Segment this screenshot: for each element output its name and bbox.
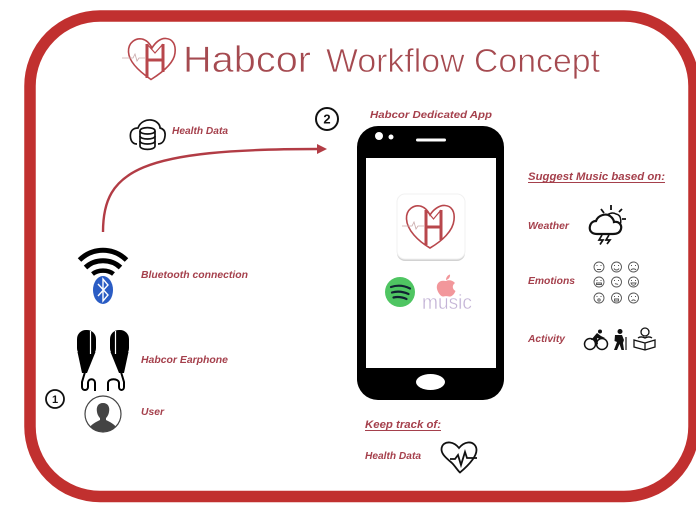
heading: keep track: Keep track of: — [365, 419, 441, 431]
label: weather: Weather — [528, 221, 570, 232]
icon: apple music — [422, 274, 472, 314]
label: dedicated app: Habcor Dedicated App — [370, 110, 492, 121]
speaker — [416, 138, 446, 142]
label: user: User — [141, 407, 165, 418]
icon: bluetooth — [93, 276, 113, 304]
label: activity: Activity — [527, 334, 565, 345]
phone screen — [366, 158, 496, 368]
icon: emotion faces grid — [594, 262, 638, 303]
label: tracked health data: Health Data — [365, 451, 421, 462]
icon: spotify — [385, 277, 415, 307]
step marker 2: 2 — [323, 112, 331, 126]
icon: activities — [584, 328, 655, 350]
icon: earphones — [77, 330, 129, 391]
label: emotions: Emotions — [528, 276, 575, 287]
icon: heart with pulse — [442, 442, 477, 472]
icon: Habcor heart logo — [122, 38, 175, 80]
icon: wifi signal — [80, 250, 126, 274]
icon: reader — [634, 328, 655, 350]
camera — [375, 132, 394, 140]
brand name: Habcor — [183, 39, 311, 80]
label: bluetooth: Bluetooth connection — [141, 270, 248, 281]
icon: apple music: music — [422, 292, 472, 314]
icon: storm cloud and sun — [590, 205, 626, 244]
phone — [357, 126, 504, 400]
home button — [416, 374, 445, 390]
heading: suggest music: Suggest Music based on: — [528, 171, 665, 183]
label: earphone: Habcor Earphone — [141, 355, 228, 366]
label: cloud health data: Health Data — [172, 126, 228, 137]
title — [122, 38, 600, 80]
step marker 2 — [316, 108, 338, 130]
icon: app tile — [397, 194, 465, 261]
arrow: earphone data to app — [103, 144, 327, 232]
heading text: Workflow Concept — [326, 42, 600, 79]
icon: cloud with database — [130, 120, 165, 149]
icon: cyclist — [584, 330, 608, 350]
icon: user avatar — [85, 396, 121, 432]
phone body — [357, 126, 504, 400]
icon: hiker — [614, 329, 626, 350]
step marker 1: 1 — [52, 394, 58, 406]
step marker 1 — [46, 390, 64, 408]
